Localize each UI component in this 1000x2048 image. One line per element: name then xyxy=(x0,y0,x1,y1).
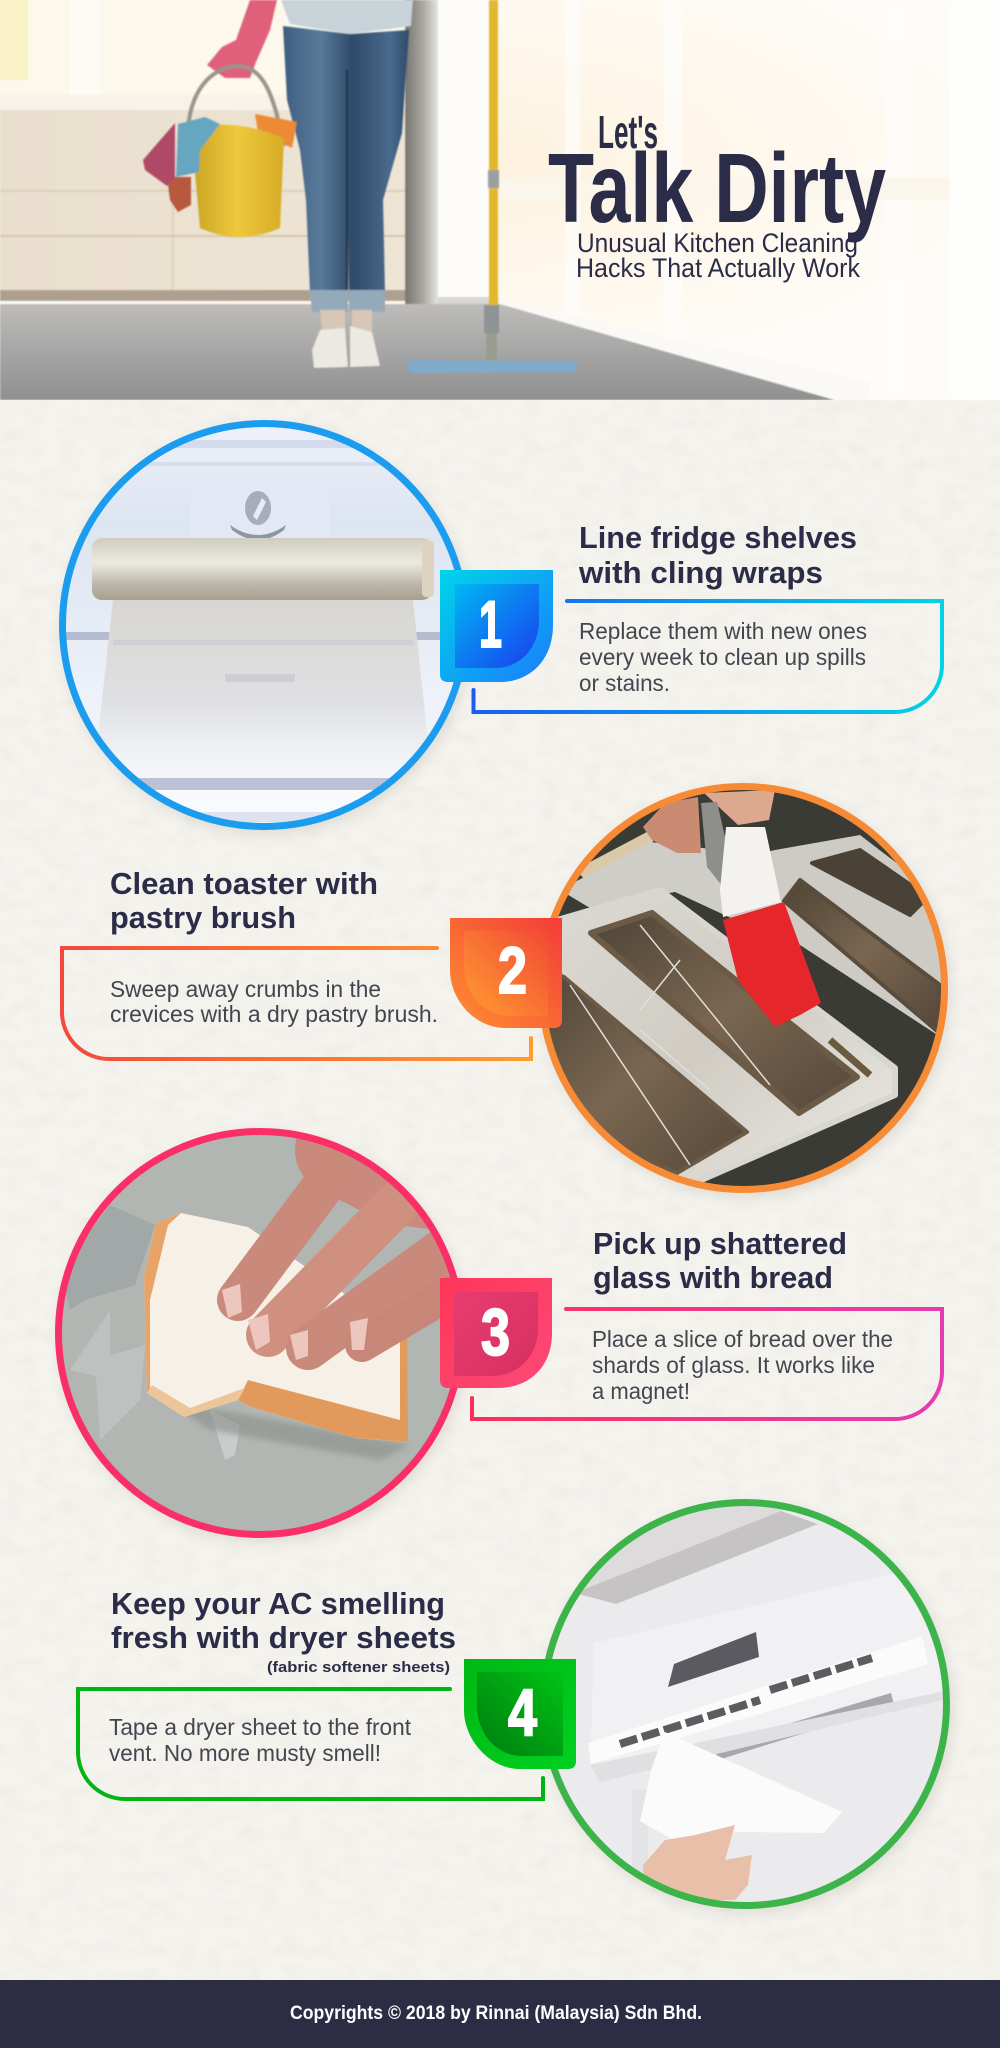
note: fabric softener sheets: (fabric softener sheets) xyxy=(267,1659,450,1676)
body text xyxy=(592,1326,893,1404)
photo: toaster and pastry brush xyxy=(535,785,950,1195)
body text: Place a slice of bread over the xyxy=(592,1326,893,1352)
step 1 panel xyxy=(60,420,942,834)
body text xyxy=(579,618,867,696)
subtitle line 1: Unusual Kitchen Cleaning xyxy=(577,228,858,258)
heading: glass with bread xyxy=(593,1260,833,1295)
body text: a magnet! xyxy=(592,1378,690,1404)
pink glove xyxy=(207,0,277,78)
number badge: 2 xyxy=(498,933,527,1007)
body text: vent. No more musty smell! xyxy=(109,1740,381,1766)
mop xyxy=(407,0,577,373)
heading: Clean toaster with xyxy=(110,866,378,901)
circle shadow xyxy=(59,1134,467,1542)
heading: with cling wraps xyxy=(578,555,823,590)
bucket with cloths xyxy=(143,66,297,237)
number badge xyxy=(440,1278,552,1388)
photo: bread on broken glass xyxy=(62,1135,450,1531)
number badge xyxy=(464,1659,576,1769)
circle shadow xyxy=(544,1505,952,1913)
number badge xyxy=(440,570,553,682)
step 2 panel xyxy=(62,785,950,1197)
number badge: 4 xyxy=(508,1675,537,1749)
number badge: 1 xyxy=(479,587,502,661)
body text xyxy=(109,1714,412,1766)
body text: Sweep away crumbs in the xyxy=(110,976,381,1002)
outline bracket xyxy=(472,1309,942,1419)
heading xyxy=(593,1226,847,1295)
ring xyxy=(542,786,944,1190)
heading xyxy=(110,866,378,935)
hand and fingers xyxy=(238,1150,480,1348)
heading xyxy=(578,520,857,590)
step 3 panel xyxy=(55,1125,942,1542)
ring xyxy=(544,1502,946,1906)
outline bracket xyxy=(78,1689,543,1799)
body text: crevices with a dry pastry brush. xyxy=(110,1001,438,1027)
hero photo: woman with bucket and mop xyxy=(0,0,1000,400)
outline bracket xyxy=(62,948,531,1059)
subtitle line 2: Hacks That Actually Work xyxy=(576,253,860,283)
footer xyxy=(0,1980,1000,2048)
heading: fresh with dryer sheets xyxy=(111,1620,456,1655)
outline bracket xyxy=(474,601,942,712)
woman figure xyxy=(281,0,413,368)
circle shadow xyxy=(63,426,471,834)
footer: Copyrights © 2018 by Rinnai (Malaysia) Sdn Bhd. xyxy=(290,2003,702,2024)
ring xyxy=(62,424,466,826)
body text: or stains. xyxy=(579,670,670,696)
number badge: 3 xyxy=(481,1295,510,1369)
heading: pastry brush xyxy=(110,900,296,935)
photo: air conditioner with dryer sheet xyxy=(540,1495,950,1910)
title block xyxy=(548,106,886,283)
heading: Keep your AC smelling xyxy=(111,1586,445,1621)
body text: Tape a dryer sheet to the front xyxy=(109,1714,412,1740)
body text xyxy=(110,976,438,1027)
body text: Replace them with new ones xyxy=(579,618,867,644)
title: Talk Dirty: Talk Dirty xyxy=(548,133,886,243)
heading xyxy=(111,1586,456,1655)
ring xyxy=(58,1132,462,1534)
heading: Pick up shattered xyxy=(593,1226,847,1261)
circle shadow xyxy=(542,789,950,1197)
body text: shards of glass. It works like xyxy=(592,1352,875,1378)
photo: cling wrap in fridge xyxy=(60,420,470,830)
body text: every week to clean up spills xyxy=(579,644,866,670)
heading: Line fridge shelves xyxy=(579,520,857,555)
number badge xyxy=(450,918,562,1028)
step 4 panel xyxy=(78,1495,952,1913)
title: Let's: Let's xyxy=(598,106,658,158)
